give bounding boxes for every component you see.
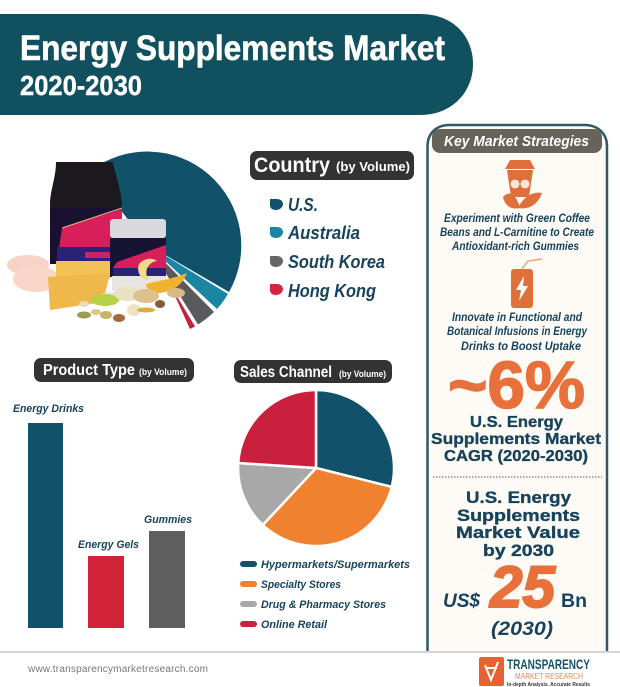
legend: country: South Korea — [288, 252, 385, 272]
heading: product type: (by Volume) — [139, 367, 187, 377]
legend: sales channel — [240, 559, 410, 631]
heading: product type — [34, 358, 194, 382]
logo: transparency market research — [479, 656, 590, 687]
stat: 6 percent CAGR: ~6% — [448, 348, 585, 423]
stat label: market value: U.S. Energy — [466, 488, 572, 507]
stat: US$ 25 Bn: 25 — [489, 555, 556, 620]
heading: product type: Product Type — [43, 362, 135, 379]
stat year: (2030) — [491, 619, 553, 640]
subtitle years: 2020-2030 — [20, 70, 142, 101]
icon: coffee cup with leaves — [503, 160, 542, 209]
strategy text 2: Drinks to Boost Uptake — [461, 341, 582, 353]
legend: country: U.S. — [288, 195, 318, 215]
heading: country — [250, 151, 414, 180]
stat label: CAGR: Supplements Market — [431, 431, 602, 448]
supplements product illustration — [7, 162, 187, 322]
bar chart: product type: Energy Drinks — [13, 403, 84, 415]
banana — [138, 259, 157, 280]
strategy text 2: Botanical Infusions in Energy — [447, 326, 588, 338]
heading: sales channel — [234, 360, 392, 383]
strategy text 1: Experiment with Green Coffee — [444, 213, 591, 225]
logo: transparency market research: TRANSPARENCY — [507, 656, 590, 672]
icon: energy drink can — [511, 259, 542, 308]
nuts and seeds — [100, 292, 124, 302]
stat label: CAGR — [431, 414, 602, 465]
stat: US$ 25 Bn: US$ — [443, 591, 480, 612]
jar — [110, 219, 166, 238]
heading: sales channel: (by Volume) — [339, 369, 386, 379]
legend: sales channel: Drug & Pharmacy Stores — [261, 599, 386, 611]
stat: US$ 25 Bn: Bn — [561, 591, 587, 612]
strategy text 2: Innovate in Functional and — [452, 312, 583, 324]
stat label: market value: Market Value — [456, 523, 580, 542]
logo: transparency market research: MARKET RESEARCH — [515, 672, 583, 681]
country pie chart — [90, 152, 241, 329]
stat: US$ 25 Bn — [443, 555, 587, 620]
panel heading: Key Market Strategies — [444, 133, 589, 150]
legend: sales channel: Hypermarkets/Supermarkets — [261, 559, 410, 571]
strategy text 1 — [440, 213, 595, 253]
black pouch — [50, 162, 122, 262]
pie chart: sales channel — [238, 390, 394, 546]
strategy text 2 — [447, 312, 588, 353]
heading: country: (by Volume) — [336, 159, 410, 174]
legend: sales channel: Online Retail — [261, 619, 328, 631]
legend: country — [270, 195, 385, 301]
bar chart: product type — [13, 403, 192, 628]
chicken breast — [7, 255, 49, 275]
heading: sales channel: Sales Channel — [240, 364, 332, 381]
cheese block — [56, 261, 110, 279]
strategy text 1: Antioxidant-rich Gummies — [451, 241, 579, 253]
heading: country: Country — [254, 154, 330, 177]
footer website url: www.transparencymarketresearch.com — [27, 664, 208, 675]
strategy text 1: Beans and L-Carnitine to Create — [440, 227, 595, 239]
stat label: market value — [456, 488, 580, 560]
stat label: market value: Supplements — [457, 506, 580, 525]
stat label: CAGR: CAGR (2020-2030) — [444, 448, 588, 465]
legend: country: Australia — [287, 223, 360, 243]
legend: sales channel: Specialty Stores — [261, 579, 341, 591]
header banner — [0, 14, 473, 115]
panel heading — [432, 129, 602, 153]
bar chart: product type: Gummies — [144, 514, 192, 526]
stat label: CAGR: U.S. Energy — [470, 414, 563, 431]
bar chart: product type: Energy Gels — [78, 539, 139, 551]
stat label: market value: by 2030 — [483, 541, 554, 560]
panel: key market strategies — [428, 125, 607, 651]
title: Energy Supplements Market — [20, 29, 445, 68]
legend: country: Hong Kong — [288, 281, 376, 301]
